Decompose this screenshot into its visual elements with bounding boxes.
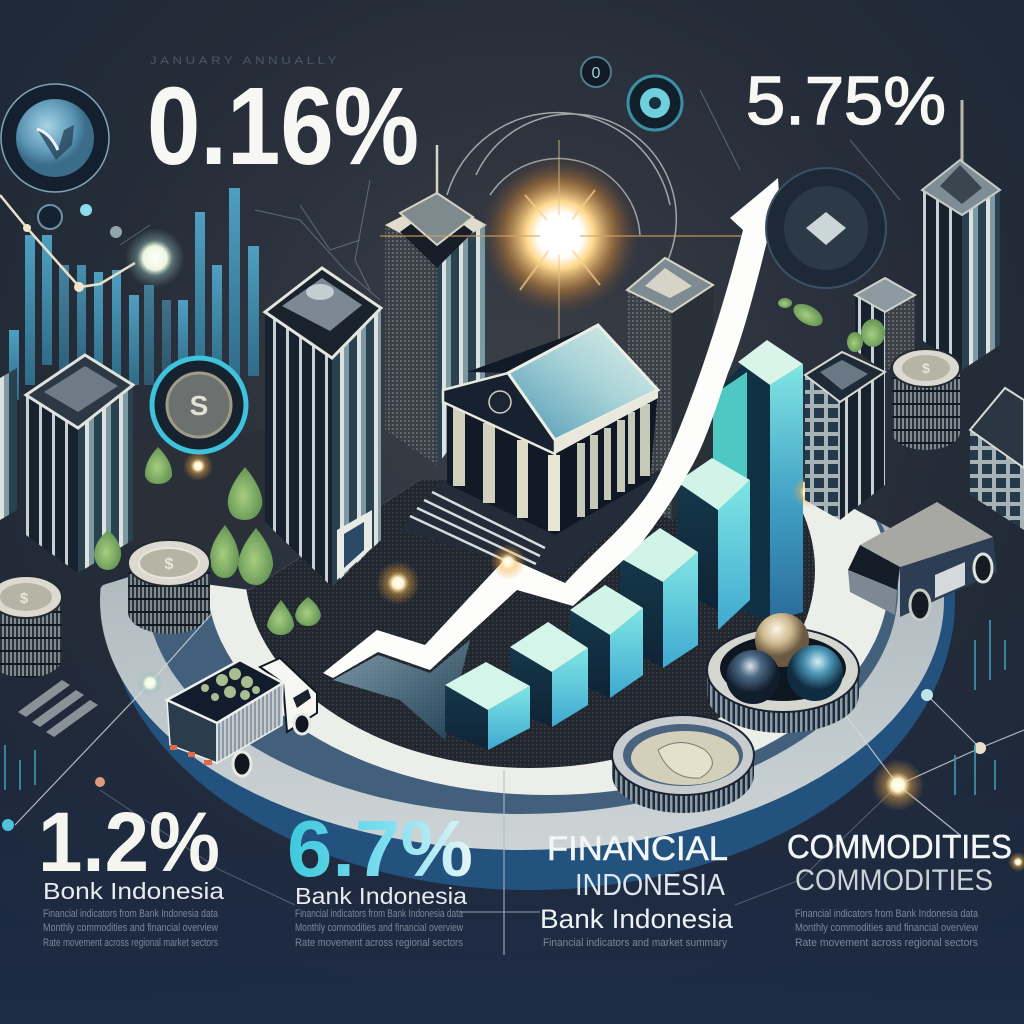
bar chart teal rising bbox=[445, 340, 803, 750]
bank building bbox=[400, 325, 660, 575]
teal accents lower corners bbox=[5, 620, 1005, 795]
coin stack centre left: $ bbox=[165, 556, 174, 573]
concentric road rings bbox=[100, 480, 955, 890]
stat block: financial Indonesia: Financial indicators and market summary bbox=[543, 937, 727, 949]
sunburst bbox=[380, 140, 745, 360]
icon: circle emblem right bbox=[766, 168, 886, 288]
stat block: commodities bbox=[787, 828, 1012, 949]
stat block: financial Indonesia: INDONESIA bbox=[575, 867, 725, 902]
stat block: 6.7%: 6.7% bbox=[287, 804, 473, 893]
stat block: 1.2%: 1.2% bbox=[38, 795, 220, 889]
glow node left bbox=[125, 228, 185, 288]
stat block: commodities: COMMODITIES bbox=[795, 864, 993, 897]
icon: teal ring top centre bbox=[628, 76, 682, 130]
stat block: 6.7%: Rate movement across regional sectors bbox=[295, 937, 463, 949]
flat coin bbox=[612, 715, 754, 813]
icon: small ring top centre bbox=[581, 57, 611, 87]
building tall left centre bbox=[265, 268, 381, 587]
trees bbox=[94, 447, 321, 635]
glow nodes bbox=[376, 476, 824, 605]
stat block: commodities: COMMODITIES bbox=[787, 828, 1012, 865]
tower right bbox=[922, 100, 1000, 370]
network lines bbox=[120, 90, 900, 300]
truck with cargo bbox=[167, 658, 317, 776]
coin stack right bbox=[892, 349, 960, 450]
building right centre bbox=[805, 352, 885, 520]
stat block: commodities: Financial indicators from Bank Indonesia data bbox=[795, 908, 979, 920]
icon: small ring top centre: 0 bbox=[592, 65, 601, 82]
stat block: 1.2%: Rate movement across regional market sectors bbox=[43, 937, 218, 949]
stat block: commodities: Rate movement across regional sectors bbox=[795, 937, 978, 949]
stat block: 1.2% bbox=[38, 795, 224, 949]
stat block: 1.2%: Bonk Indonesia bbox=[43, 878, 224, 904]
building far left bbox=[0, 368, 17, 520]
plate under left buildings bbox=[130, 430, 265, 545]
stat block: 6.7%: Monthly commodities and financial overview bbox=[295, 922, 463, 934]
stat block: 6.7%: Bank Indonesia bbox=[295, 883, 467, 909]
icon: cyan ring coin bbox=[152, 358, 246, 481]
faint header text: JANUARY ANNUALLY bbox=[150, 55, 340, 67]
stat block: financial Indonesia: FINANCIAL bbox=[547, 830, 728, 868]
stat block: 1.2%: Financial indicators from Bank Indonesia data bbox=[43, 908, 219, 920]
trend line over left bars bbox=[0, 195, 135, 292]
icon: cyan ring coin: S bbox=[190, 390, 208, 421]
arrow shadow on plaza bbox=[333, 640, 470, 740]
coin stack right: $ bbox=[922, 360, 930, 376]
coin stack far left: $ bbox=[20, 590, 29, 607]
trees right bbox=[778, 298, 885, 352]
stat block: 6.7%: Financial indicators from Bank Indonesia data bbox=[295, 908, 464, 920]
stat block: 6.7% bbox=[287, 804, 473, 949]
coin stack centre left bbox=[128, 540, 210, 634]
tower behind bank right bbox=[627, 258, 713, 520]
stat block: financial Indonesia: Bank Indonesia bbox=[540, 904, 734, 934]
crosswalk bbox=[18, 680, 98, 737]
bowl with spheres bbox=[707, 613, 859, 733]
headline stat 5.75%: 5.75% bbox=[746, 63, 946, 139]
headline stat 0.16%: 0.16% bbox=[147, 65, 419, 188]
stat block: financial Indonesia bbox=[460, 770, 734, 955]
sun rings bbox=[447, 113, 676, 260]
coin stack far left bbox=[0, 576, 62, 678]
tower back centre bbox=[385, 145, 487, 465]
network nodes lower bbox=[2, 610, 1024, 905]
small building right bbox=[855, 278, 915, 372]
icon: disc emblem top left bbox=[1, 84, 109, 192]
building far right bbox=[970, 388, 1024, 530]
building left bbox=[26, 355, 133, 573]
stat block: commodities: Monthly commodities and financial overview bbox=[795, 922, 978, 934]
stat block: 1.2%: Monthly commodities and financial overview bbox=[43, 922, 218, 934]
rising arrow bbox=[323, 178, 782, 678]
blue bar chart left bbox=[9, 188, 259, 400]
delivery van bbox=[848, 502, 997, 620]
